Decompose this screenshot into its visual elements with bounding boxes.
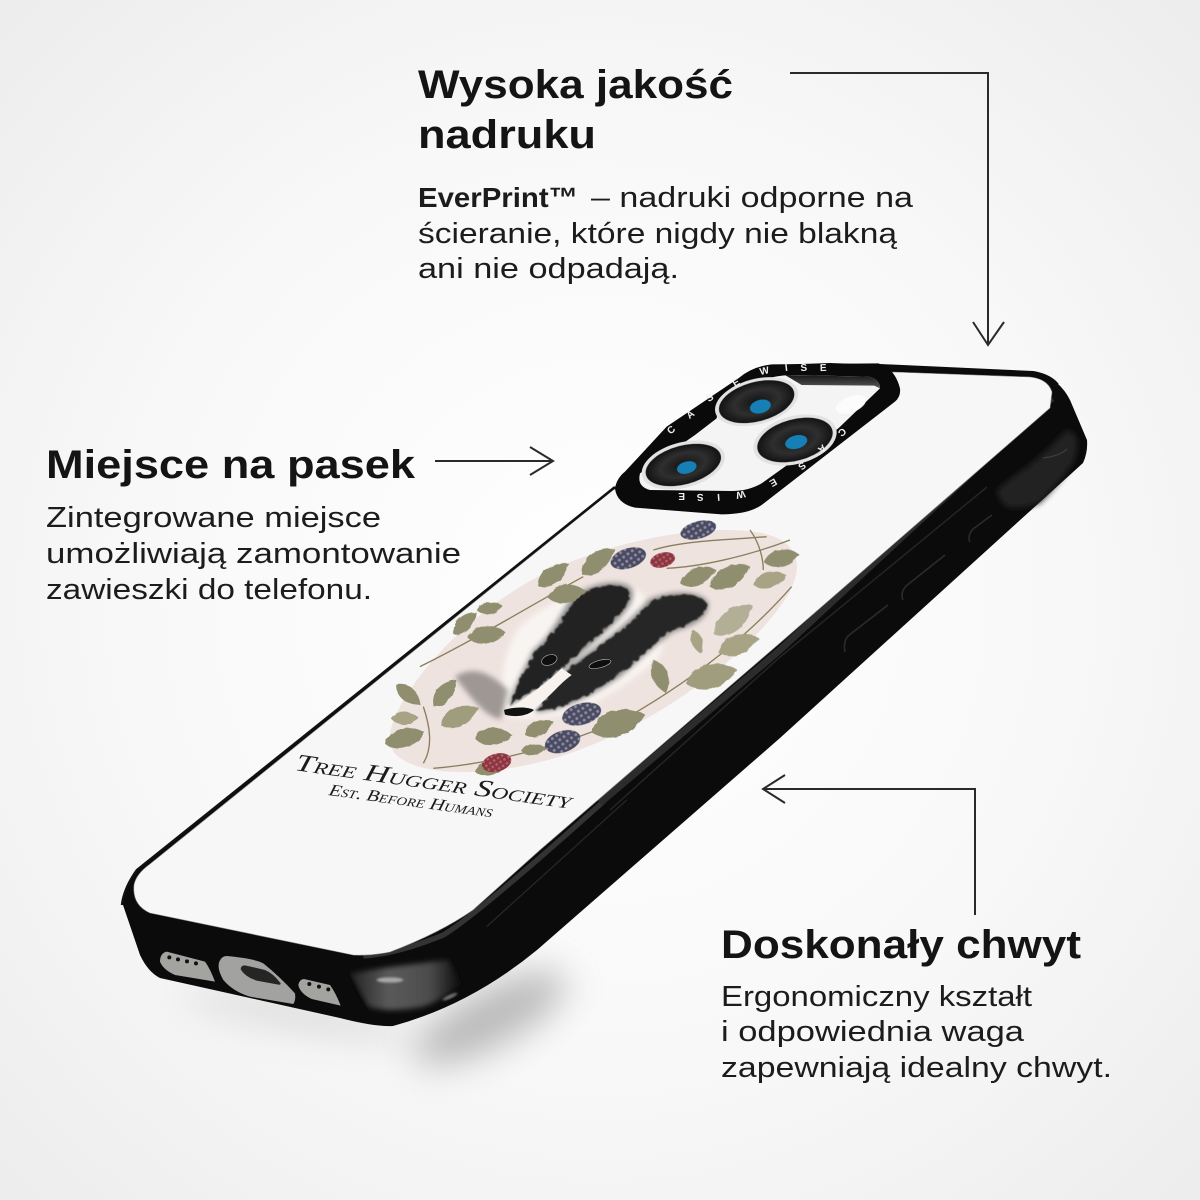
rim line top <box>880 366 1057 385</box>
upper bevel <box>600 398 1052 803</box>
ring lettering bottom: E <box>678 490 685 501</box>
volume down button <box>844 605 888 652</box>
ring lettering top: E <box>731 377 742 390</box>
body text: – nadruki odporne na <box>591 182 914 214</box>
ring lettering top: A <box>685 408 697 422</box>
nose <box>504 707 534 716</box>
ring lettering top: W <box>759 365 771 378</box>
body text: umożliwiają zamontowanie <box>46 538 461 570</box>
body text <box>418 182 914 285</box>
ring lettering top: S <box>704 392 716 405</box>
phone case <box>122 363 1087 1026</box>
pink oval <box>390 530 797 772</box>
ear smudge <box>455 671 508 719</box>
heading: Miejsce na pasek <box>46 443 416 487</box>
left stripe <box>509 586 630 705</box>
ring lettering bottom: E <box>767 475 779 488</box>
blackberries <box>542 517 718 757</box>
ring lettering top: S <box>800 363 808 374</box>
ring lettering top: I <box>784 363 789 374</box>
glass recess shading <box>785 375 880 388</box>
ring lettering bottom <box>678 425 848 502</box>
ring lettering bottom: S <box>795 459 808 472</box>
artwork caption <box>292 750 577 821</box>
phone shadow <box>179 953 578 1083</box>
charging port <box>219 956 295 1004</box>
rim line left <box>122 487 615 905</box>
ring lettering bottom: W <box>734 487 746 500</box>
side buttons <box>844 515 992 652</box>
side bevel <box>363 800 627 956</box>
back panel <box>134 372 1052 955</box>
body text: Ergonomiczny kształt <box>721 981 1032 1013</box>
callout: print quality <box>418 63 914 285</box>
arrow: to top edge <box>790 73 1004 345</box>
ring lettering bottom: S <box>696 491 704 502</box>
top right corner reflection <box>997 430 1077 508</box>
camera glass <box>639 375 880 491</box>
flash <box>833 391 869 418</box>
volume up button <box>902 555 945 600</box>
corner reflection line <box>1043 449 1067 458</box>
callout: grip <box>721 923 1112 1084</box>
eyes <box>540 653 612 670</box>
bottom corner reflection <box>347 960 460 1011</box>
ring lettering bottom: I <box>717 491 720 502</box>
caption line 2: Est. Before Humans <box>326 780 495 821</box>
left stripe shadow <box>508 583 633 706</box>
ring lettering top <box>665 363 827 437</box>
heading: Wysoka jakość <box>418 63 733 107</box>
case body <box>123 363 1087 1026</box>
lower lens <box>636 432 730 498</box>
right stripe <box>537 594 707 712</box>
body text <box>46 502 461 606</box>
body text: zapewniają idealny chwyt. <box>721 1052 1112 1084</box>
body text: ścieranie, które nigdy nie blakną <box>418 218 898 250</box>
upper lens <box>710 369 804 435</box>
ring lettering bottom: A <box>815 442 828 455</box>
caption line 1: Tree Hugger Society <box>292 750 577 815</box>
body text <box>721 981 1112 1084</box>
ring lettering bottom: C <box>835 425 848 438</box>
muzzle highlight <box>508 668 572 713</box>
side inner line <box>610 487 987 810</box>
artwork: badger oval <box>382 517 801 778</box>
body text: zawieszki do telefonu. <box>46 574 372 606</box>
body text: EverPrint™ <box>418 182 578 213</box>
ring lettering top: E <box>820 363 827 374</box>
right lens <box>748 406 842 474</box>
body text: Zintegrowane miejsce <box>46 502 381 534</box>
heading: Doskonały chwyt <box>721 923 1081 967</box>
arrow: to grip side <box>763 775 975 915</box>
camera module <box>615 363 900 514</box>
arrow: to strap slot <box>435 447 553 475</box>
callout: strap slot <box>46 443 461 606</box>
red berries <box>480 550 677 775</box>
heading <box>418 63 733 157</box>
bottom speaker right <box>298 979 341 1006</box>
ring lettering top: C <box>665 424 678 437</box>
action button <box>969 515 992 542</box>
camera ring <box>615 363 900 514</box>
leaves <box>382 541 801 778</box>
body text: ani nie odpadają. <box>418 253 679 285</box>
bottom speaker left <box>160 952 215 982</box>
badger head <box>502 585 663 719</box>
right stripe shadow <box>535 593 708 713</box>
body text: i odpowiednia waga <box>721 1016 1025 1048</box>
heading: nadruku <box>418 113 596 157</box>
vines <box>420 530 792 768</box>
